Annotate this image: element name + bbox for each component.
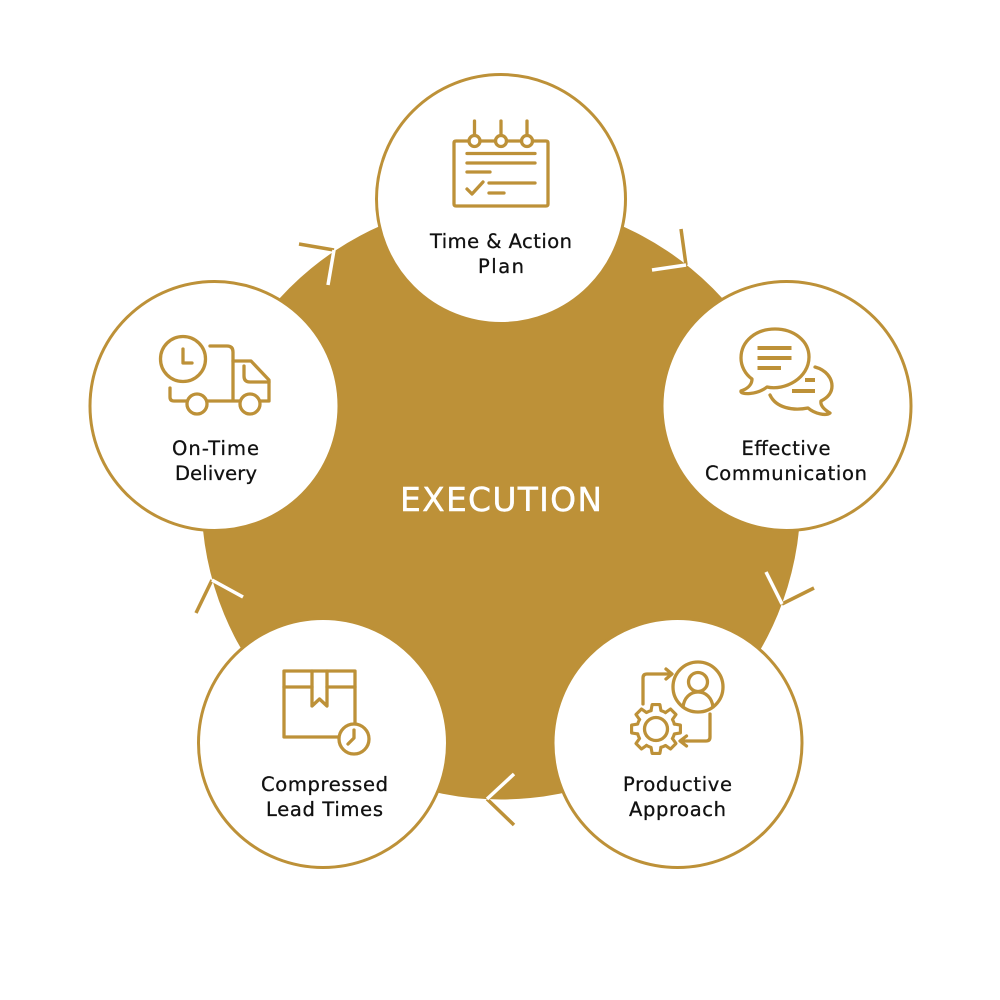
arrow: lead times to delivery bbox=[196, 580, 243, 613]
label: effective communication: Effective bbox=[742, 437, 830, 460]
label: time and action plan: Plan bbox=[478, 255, 524, 278]
label: on-time delivery: Delivery bbox=[175, 462, 257, 485]
icon: speech bubbles bbox=[741, 329, 832, 414]
label: compressed lead times: Lead Times bbox=[266, 798, 383, 821]
arrow: plan to communication bbox=[652, 229, 686, 270]
label: compressed lead times bbox=[261, 773, 388, 821]
label: time and action plan: Time & Action bbox=[429, 230, 572, 253]
panel: on-time delivery bbox=[90, 282, 339, 530]
icon: calendar bbox=[454, 121, 548, 206]
icon: box with clock bbox=[284, 671, 369, 754]
icon: truck with clock bbox=[160, 336, 269, 414]
label: productive approach bbox=[623, 773, 732, 821]
heading: execution: EXECUTION bbox=[400, 480, 602, 519]
label: on-time delivery: On-Time bbox=[172, 437, 259, 460]
central gold circle bbox=[202, 200, 800, 800]
label: effective communication: Communication bbox=[705, 462, 867, 485]
panel: compressed lead times bbox=[198, 618, 448, 868]
icon: gear and person cycle bbox=[632, 662, 723, 753]
label: productive approach: Approach bbox=[629, 798, 726, 821]
label: compressed lead times: Compressed bbox=[261, 773, 388, 796]
arrow: approach to lead times bbox=[487, 774, 514, 825]
label: effective communication bbox=[705, 437, 867, 485]
panel: productive approach bbox=[553, 618, 802, 868]
label: time and action plan bbox=[429, 230, 572, 278]
panel: effective communication bbox=[662, 282, 911, 530]
arrow: communication to approach bbox=[766, 572, 814, 604]
arrow: delivery to plan bbox=[299, 244, 334, 285]
label: productive approach: Productive bbox=[623, 773, 732, 796]
panel: time and action plan bbox=[376, 74, 626, 324]
label: on-time delivery bbox=[172, 437, 259, 485]
